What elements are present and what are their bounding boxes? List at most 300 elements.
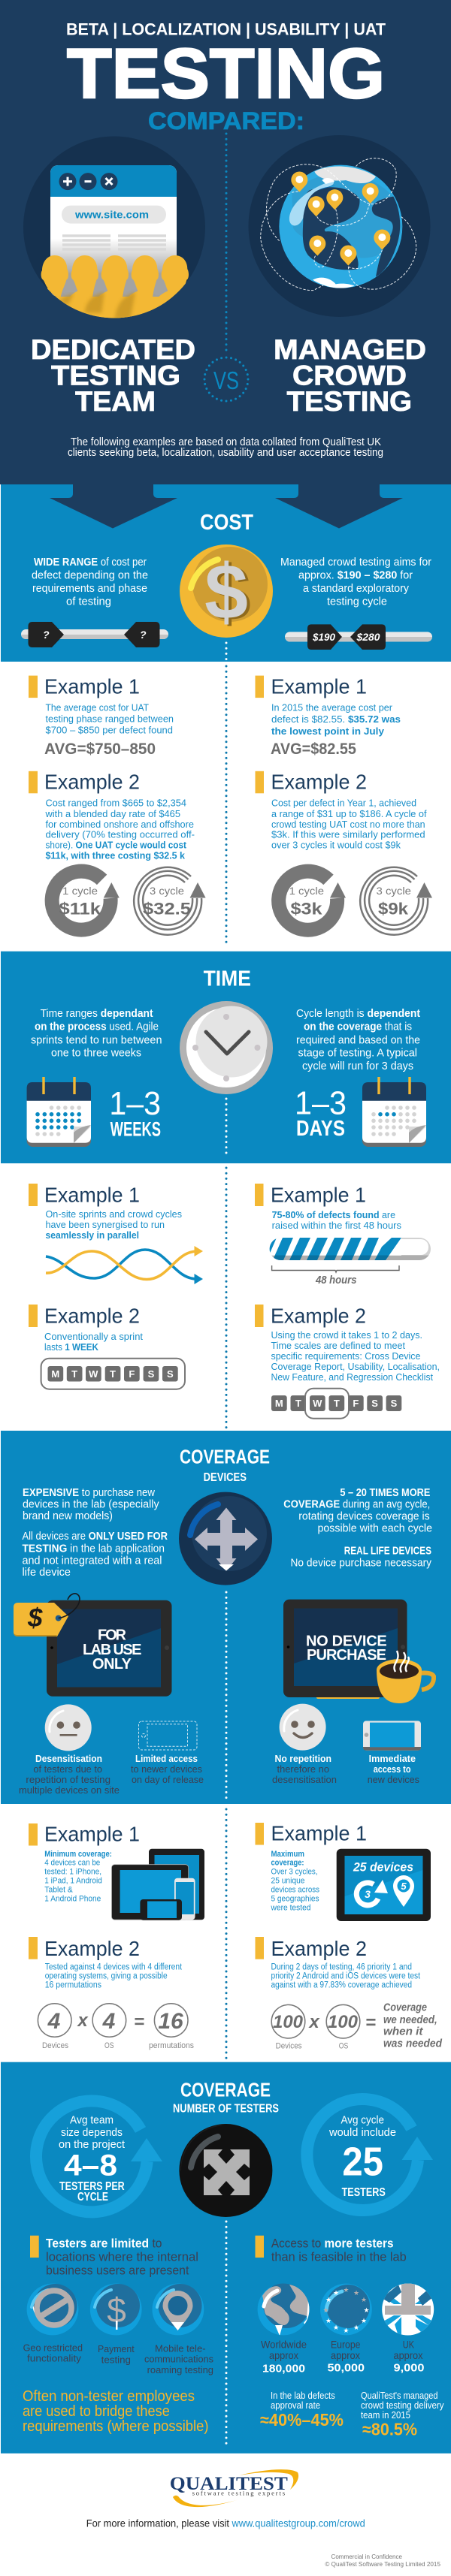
text: immediate access: new devices	[368, 1774, 419, 1785]
formula: 4 x 4 = 16: Devices	[42, 2041, 68, 2050]
center dotted line	[226, 134, 227, 354]
text: crowd cost summary: approx. $190 – $280 for	[298, 569, 413, 581]
stat: 1-3 days	[295, 1084, 347, 1141]
text: payment testing label: testing	[101, 2354, 131, 2366]
text: europe count: approx	[331, 2349, 360, 2361]
text: dedicated devices: brand new models)	[23, 1510, 113, 1522]
icon: tablet 25 devices: 3	[365, 1888, 371, 1900]
text: desensitisation: Desensitisation	[35, 1753, 102, 1764]
text: copyright	[325, 2553, 440, 2568]
example 1: maximum coverage: Maximum	[271, 1850, 304, 1859]
chart: progress bar	[269, 1238, 431, 1283]
text: immediate access	[368, 1753, 419, 1785]
text: immediate access: Immediate	[369, 1753, 416, 1764]
text: crowd testers: 25	[342, 2140, 383, 2185]
icon: tablet no device purchase	[283, 1600, 407, 1699]
callout: non-tester employees	[23, 2388, 209, 2435]
text: team size: Avg team	[70, 2115, 114, 2127]
text: crowd time: required and based on the	[296, 1034, 420, 1046]
icon: 1 cycle 11k: $11k	[59, 900, 101, 918]
text: geo restricted label: Geo restricted	[23, 2342, 83, 2354]
example 2: permutations: Tested against 4 devices with 4 different	[45, 1963, 183, 1972]
icon: browser window with team	[23, 137, 205, 330]
example 2: two day cycle: Time scales are defined to meet	[271, 1340, 405, 1351]
slider: dedicated unknown range	[21, 622, 168, 647]
example 2: two day cycle: Example 2	[271, 1305, 366, 1328]
week strip: seven days: W	[89, 1368, 98, 1380]
text: crowd time: on the coverage that is	[304, 1021, 412, 1033]
text: roaming testing label: Mobile tele-	[155, 2343, 206, 2354]
text: worldwide count	[261, 2339, 307, 2375]
text: team size: CYCLE	[77, 2191, 108, 2203]
week strip: highlighted days: T	[295, 1398, 301, 1409]
week strip: highlighted days: W	[313, 1398, 322, 1409]
formula: 100 x 100: when it	[383, 2025, 424, 2038]
example 1: dedicated cost: The average cost for UAT	[45, 701, 149, 713]
icon: tablet no device purchase: NO DEVICE	[306, 1633, 387, 1649]
icon: directional arrows	[179, 1492, 272, 1585]
example 2: coverage achieved: against with a 97.83% coverage achieved	[271, 1981, 412, 1990]
icon: payment dollar	[90, 2284, 142, 2335]
text: crowd testers	[328, 2115, 396, 2199]
heading: coverage number of testers: COVERAGE	[180, 2079, 271, 2101]
text: dedicated time	[31, 1008, 162, 1060]
formula: 100 x 100: was needed	[383, 2037, 443, 2050]
stat: lab approval rate	[260, 2390, 344, 2430]
logo: qualitest: QUALITEST	[170, 2474, 288, 2494]
icon: expand arrows	[179, 2124, 272, 2217]
formula: 100 x 100: =	[365, 2013, 376, 2033]
example 2: crowd cost: over 3 cycles it would cost $9k	[271, 840, 401, 851]
subtitle: test types: BETA | LOCALIZATION | USABILITY | UAT	[66, 20, 386, 39]
text: crowd devices: 5 – 20 TIMES MORE	[340, 1487, 431, 1499]
text: immediate access: access to	[374, 1763, 411, 1775]
icon: 3 cycle 32.5: $32.5	[143, 900, 191, 918]
icon: europe stars: ★	[353, 2290, 359, 2297]
text: crowd cost summary	[280, 557, 431, 608]
example 1: parallel cycles: Example 1	[44, 1184, 140, 1207]
text: dedicated devices: devices in the lab (especially	[23, 1499, 159, 1511]
icon: location pin	[152, 2284, 204, 2335]
text: crowd testers: would include	[328, 2127, 396, 2139]
heading: compared: COMPARED:	[148, 107, 304, 134]
icon: europe stars: ★	[343, 2327, 349, 2335]
example 1: minimum coverage	[29, 1822, 204, 1920]
text: crowd cost summary: testing cycle	[327, 596, 387, 608]
callout: non-tester employees: Often non-tester employees	[23, 2388, 195, 2405]
formula: 100 x 100: 100	[328, 2012, 359, 2032]
formula: 100 x 100: Coverage	[383, 2001, 427, 2014]
example 2: two day cycle: Using the crowd it takes 1 to 2 days.	[271, 1329, 422, 1341]
example 1: first 48 hours: raised within the first 48 hours	[272, 1220, 401, 1231]
icon: coffee cup	[377, 1651, 434, 1703]
panel: footer	[86, 2469, 440, 2568]
text: crowd time: stage of testing. A typical	[298, 1048, 417, 1060]
example 2: permutations: operating systems, giving a possible	[45, 1972, 168, 1981]
example 2: dedicated cost: Example 2	[44, 771, 140, 794]
icon: 1 cycle 3k: 1 cycle	[289, 885, 324, 897]
heading: coverage number of testers	[173, 2079, 279, 2115]
example 1: minimum coverage: 1 iPad, 1 Android	[44, 1877, 102, 1886]
example 2: dedicated cost: shore). One UAT cycle would cost	[45, 840, 187, 851]
text: more information: For more information, please visit www.qualitestgroup.com/crowd	[86, 2517, 365, 2529]
week strip: highlighted days: M	[275, 1398, 283, 1409]
example 1: dedicated cost: Example 1	[44, 675, 140, 698]
example 1: crowd cost	[256, 675, 401, 758]
text: team size: on the project	[59, 2139, 125, 2151]
heading: cost: COST	[200, 511, 253, 535]
heading: dedicated testing team: DEDICATED	[31, 334, 195, 365]
text: dedicated devices: and not integrated with a real	[23, 1555, 162, 1567]
icon: price tag: $	[27, 1603, 43, 1633]
formula: 4 x 4 = 16: =	[134, 2012, 144, 2032]
example 1: first 48 hours: Example 1	[271, 1184, 366, 1207]
icon: payment dollar: $	[107, 2291, 126, 2330]
week strip: seven days: T	[110, 1368, 116, 1380]
formula: 4 x 4 = 16: x	[76, 2010, 89, 2031]
text: geo restricted label: functionality	[27, 2353, 82, 2364]
text: europe count	[328, 2339, 365, 2375]
text: payment testing label: Payment	[98, 2343, 135, 2354]
heading: coverage devices: DEVICES	[204, 1471, 247, 1484]
example 2: one week sprint	[29, 1305, 185, 1389]
icon: 1 cycle 11k	[52, 871, 120, 930]
icon: browser window with team: www.site.com	[74, 209, 149, 221]
example 1: crowd cost: In 2015 the average cost per	[271, 701, 393, 713]
text: crowd devices: rotating devices coverage is	[298, 1511, 430, 1523]
example 2: crowd cost: Cost per defect in Year 1, achieved	[271, 798, 416, 809]
stat: lab approval rate: In the lab defects	[271, 2390, 335, 2401]
icon: europe stars: ★	[325, 2318, 331, 2325]
text: uk count: UK	[403, 2339, 415, 2351]
slider: dedicated unknown range: ?	[140, 629, 147, 641]
example 1: first 48 hours	[255, 1184, 431, 1286]
callout: non-tester employees: requirements (where possible)	[23, 2418, 209, 2435]
text: dedicated cost summary: of testing	[66, 596, 111, 608]
text: no repetition: No repetition	[275, 1753, 331, 1764]
example 1: crowd cost: AVG=$82.55	[271, 741, 356, 758]
text: copyright: © QualiTest Software Testing Limited 2015	[325, 2560, 440, 2568]
text: team size: 4–8	[64, 2149, 117, 2182]
week strip: seven days: M	[51, 1368, 59, 1380]
text: payment testing label	[98, 2343, 135, 2366]
icon: 3 cycle 9k: $9k	[378, 900, 409, 918]
example 1: parallel cycles: seamlessly in parallel	[45, 1229, 139, 1241]
example 1: maximum coverage: 25 unique	[271, 1877, 305, 1886]
panel: coverage testers	[1, 2062, 451, 2454]
example 2: coverage achieved: During 2 days of testing, 46 priority 1 and	[271, 1963, 412, 1972]
icon: new phone	[363, 1721, 421, 1751]
stat: 1-3 weeks	[109, 1085, 161, 1140]
text: dedicated time: one to three weeks	[51, 1048, 141, 1060]
stat: crowd approval rate: ≈80.5%	[362, 2420, 417, 2439]
text: dedicated time: Time ranges dependant	[41, 1008, 153, 1020]
intro text: The following examples are based on data collated from QualiTest UK	[71, 436, 381, 448]
example 2: permutations: Example 2	[44, 1937, 140, 1960]
example 2: dedicated cost: with a blended day rate of $465	[45, 808, 180, 819]
panel: cost	[1, 484, 451, 662]
example 1: minimum coverage: tested: 1 iPhone,	[44, 1868, 101, 1877]
heading: coverage devices: COVERAGE	[180, 1446, 270, 1468]
text: no repetition	[272, 1753, 337, 1785]
example 1: dedicated cost: testing phase ranged between	[45, 713, 174, 724]
example 2: coverage achieved	[256, 1937, 443, 2050]
example 1: maximum coverage: 5 geographies	[271, 1895, 319, 1904]
text: dedicated cost summary: defect depending on the	[32, 569, 148, 581]
example 2: dedicated cost: delivery (70% testing occurred off-	[45, 829, 195, 840]
callout: non-tester employees: are used to bridge these	[23, 2403, 170, 2420]
example 2: coverage achieved: priority 2 Android and iOS devices were test	[271, 1972, 421, 1981]
text: crowd testers: Avg cycle	[341, 2115, 384, 2127]
heading: dedicated testing team: TESTING	[51, 360, 180, 391]
example 2: dedicated cost: for combined onshore and offshore	[45, 819, 194, 830]
text: crowd devices: No device purchase necessary	[290, 1558, 432, 1570]
text: uk count: 9,000	[394, 2362, 424, 2375]
icon: tablet lab use only: ONLY	[92, 1656, 132, 1673]
icon: tablet 25 devices	[337, 1849, 431, 1921]
icon: dollar coin: $	[207, 550, 251, 638]
icon: calendar days	[362, 1077, 426, 1147]
text: access to more testers: than is feasible in the lab	[271, 2249, 407, 2264]
icon: tablet no device purchase: PURCHASE	[307, 1647, 386, 1664]
text: uk count	[394, 2339, 424, 2375]
panel: cost examples	[29, 666, 432, 947]
text: crowd time: Cycle length is dependent	[296, 1008, 420, 1020]
text: limited access: Limited access	[135, 1753, 198, 1764]
example 2: permutations	[29, 1937, 194, 2050]
formula: 100 x 100: x	[307, 2012, 320, 2032]
text: dedicated cost summary	[32, 557, 148, 608]
icon: 1 cycle 11k: 1 cycle	[62, 885, 98, 897]
example 1: parallel cycles: have been synergised to run	[45, 1219, 165, 1230]
text: testers limited: Testers are limited to	[46, 2237, 162, 2251]
text: worldwide count: 180,000	[262, 2363, 305, 2375]
icon: price tag	[14, 1594, 80, 1636]
icon: worldwide globe	[258, 2282, 311, 2336]
text: uk count: approx	[394, 2349, 422, 2361]
icon: tablet 25 devices: 5	[401, 1881, 407, 1892]
panel: time	[1, 952, 451, 1163]
text: no repetition: therefore no	[277, 1763, 329, 1775]
text: testers limited: business users are present	[46, 2264, 189, 2278]
example 1: minimum coverage: Example 1	[44, 1822, 140, 1845]
heading: managed crowd testing: MANAGED	[274, 334, 426, 365]
stat: crowd approval rate: QualiTest's managed	[361, 2390, 438, 2401]
icon: tablet lab use only	[47, 1600, 171, 1697]
title: testing: TESTING	[67, 34, 385, 113]
slider: crowd price range	[285, 624, 432, 650]
example 2: coverage achieved: Example 2	[271, 1937, 367, 1960]
stat: 1-3 weeks: WEEKS	[110, 1118, 161, 1140]
panel: header	[0, 0, 451, 484]
icon: happy face	[280, 1704, 326, 1751]
formula: 4 x 4 = 16: OS	[104, 2041, 114, 2050]
icon: neutral face	[45, 1704, 92, 1751]
text: team size: TESTERS PER	[59, 2180, 125, 2193]
badge: vs	[204, 357, 248, 401]
formula: 100 x 100	[271, 2001, 443, 2050]
text: dedicated time: on the process used. Agile	[35, 1021, 159, 1033]
icon: europe stars: ★	[322, 2307, 329, 2315]
icon: europe stars: ★	[333, 2290, 339, 2297]
text: testers limited: locations where the internal	[46, 2250, 198, 2264]
example 1: maximum coverage	[256, 1822, 431, 1921]
example 2: crowd cost: crowd testing UAT cost no more than	[271, 819, 425, 830]
week strip: highlighted days	[271, 1389, 401, 1419]
text: desensitisation: of testers due to	[33, 1763, 102, 1775]
stat: 1-3 days: 1–3	[295, 1084, 347, 1122]
example 2: dedicated cost	[29, 771, 195, 861]
icon: dollar coin	[180, 544, 273, 638]
icon: 3 cycle 9k	[360, 867, 432, 935]
formula: 4 x 4 = 16: 4	[102, 2009, 116, 2034]
example 1: first 48 hours: 75-80% of defects found are	[272, 1209, 395, 1220]
formula: 100 x 100: OS	[339, 2041, 348, 2050]
text: worldwide count: approx	[269, 2349, 298, 2361]
icon: globe with pins	[248, 135, 430, 317]
icon: geo restricted	[27, 2284, 78, 2335]
example 1: maximum coverage: Example 1	[271, 1822, 367, 1845]
example 1: maximum coverage: devices across	[271, 1886, 319, 1895]
icon: tablet lab use only: FOR	[98, 1627, 127, 1644]
icon: europe stars: ★	[363, 2307, 370, 2315]
icon: device group	[111, 1849, 204, 1920]
example 1: maximum coverage: Over 3 cycles,	[271, 1868, 317, 1877]
text: team size	[59, 2115, 125, 2203]
example 2: one week sprint: lasts 1 WEEK	[44, 1341, 99, 1353]
icon: 1 cycle 3k: $3k	[290, 900, 322, 918]
formula: 4 x 4 = 16: 4	[47, 2009, 61, 2034]
text: dedicated cost summary: requirements and phase	[32, 583, 147, 595]
icon: 3 cycle 9k: 3 cycle	[376, 885, 411, 897]
slider: crowd price range: $190	[312, 631, 335, 643]
stat: crowd approval rate	[361, 2390, 444, 2439]
arrow: right header pointer	[275, 484, 403, 529]
example 2: crowd cost: Example 2	[271, 771, 367, 794]
example 1: minimum coverage: Minimum coverage:	[44, 1850, 112, 1859]
chart: intertwined arrows	[46, 1246, 203, 1284]
icon: 1 cycle 3k	[279, 871, 346, 930]
example 1: parallel cycles: On-site sprints and crowd cycles	[45, 1208, 182, 1220]
icon: europe stars: ★	[361, 2297, 367, 2304]
text: crowd devices: possible with each cycle	[317, 1522, 432, 1534]
heading: managed crowd testing: TESTING	[287, 386, 412, 417]
example 1: dedicated cost: $700 – $850 per defect found	[45, 724, 173, 735]
panel: coverage devices	[1, 1431, 451, 1804]
heading: dedicated testing team: TEAM	[75, 386, 156, 417]
text: desensitisation: repetition of testing	[26, 1774, 110, 1785]
stat: lab approval rate: approval rate	[271, 2400, 320, 2411]
text: dedicated devices: TESTING in the lab application	[23, 1543, 165, 1555]
example 1: parallel cycles	[29, 1184, 203, 1284]
formula: 100 x 100: we needed,	[383, 2013, 437, 2026]
icon: europe stars: ★	[343, 2287, 349, 2294]
text: crowd devices	[283, 1487, 432, 1570]
stat: lab approval rate: ≈40%–45%	[260, 2410, 344, 2430]
week strip: highlighted days: S	[391, 1398, 398, 1409]
icon: 3 cycle 32.5	[134, 867, 206, 935]
text: geo restricted label	[23, 2342, 83, 2364]
stat: 1-3 days: DAYS	[296, 1117, 345, 1141]
example 1: maximum coverage: were tested	[271, 1904, 311, 1913]
example 1: minimum coverage: Tablet &	[44, 1886, 73, 1895]
text: crowd devices: COVERAGE during an avg cycle,	[283, 1499, 430, 1511]
text: europe count: 50,000	[328, 2362, 365, 2375]
text: crowd time	[296, 1008, 420, 1072]
icon: dollar coin: $	[204, 549, 248, 636]
text: roaming testing label: communications	[144, 2354, 213, 2365]
week strip: highlighted days: F	[353, 1398, 359, 1409]
example 1: crowd cost: defect is $82.55. $35.72 was	[271, 713, 401, 725]
text: dedicated cost summary: WIDE RANGE of cost per	[34, 557, 147, 569]
icon: dashed phone	[138, 1721, 197, 1750]
formula: 4 x 4 = 16	[38, 2004, 194, 2050]
chart: progress bar: 48 hours	[315, 1274, 356, 1286]
example 1: crowd cost: Example 1	[271, 675, 367, 698]
heading: dedicated testing team	[31, 334, 195, 417]
formula: 100 x 100: 100	[273, 2012, 304, 2032]
example 2: crowd cost: $3k. If this were similarly performed	[271, 829, 425, 840]
example 1: minimum coverage: 4 devices can be	[44, 1858, 100, 1867]
text: roaming testing label	[144, 2343, 213, 2375]
example 1: dedicated cost	[29, 675, 174, 758]
text: europe count: Europe	[331, 2339, 361, 2351]
icon: 3 cycle 32.5: 3 cycle	[150, 885, 184, 897]
slider: dedicated unknown range: ?	[43, 629, 50, 641]
text: limited access	[131, 1753, 204, 1785]
text: access to more testers	[256, 2236, 407, 2264]
text: crowd time: cycle will run for 3 days	[302, 1060, 413, 1072]
example 1: dedicated cost: AVG=$750–850	[44, 741, 156, 758]
logo: qualitest	[170, 2469, 298, 2507]
intro text: clients seeking beta, localization, usability and user acceptance testing	[68, 447, 383, 459]
slider: crowd price range: $280	[356, 631, 380, 643]
formula: 4 x 4 = 16: 16	[158, 2009, 183, 2034]
example 2: crowd cost	[256, 771, 427, 851]
formula: 100 x 100: Devices	[276, 2041, 302, 2050]
panel: time examples	[29, 1168, 440, 1428]
text: testers limited	[30, 2236, 198, 2278]
text: crowd cost summary: Managed crowd testing aims for	[280, 557, 431, 569]
icon: clock	[180, 1001, 273, 1094]
week strip: highlighted days: S	[371, 1398, 378, 1409]
example 1: minimum coverage: 1 Android Phone	[44, 1895, 101, 1904]
text: dedicated devices: life device	[23, 1567, 71, 1579]
text: dedicated time: sprints tend to run between	[31, 1034, 162, 1046]
heading: coverage devices	[180, 1446, 270, 1484]
text: team size: size depends	[61, 2127, 123, 2139]
text: desensitisation: multiple devices on site	[19, 1784, 120, 1796]
example 2: one week sprint: Example 2	[44, 1305, 140, 1328]
heading: managed crowd testing	[274, 334, 426, 417]
week strip: seven days: S	[148, 1368, 155, 1380]
text: no repetition: desensitisation	[272, 1774, 337, 1785]
text: dedicated devices	[23, 1487, 168, 1579]
text: dedicated devices: All devices are ONLY USED FOR	[23, 1531, 168, 1543]
week strip: seven days: F	[129, 1368, 135, 1380]
icon: europe stars: ★	[333, 2324, 339, 2332]
icon: calendar weeks	[27, 1077, 91, 1147]
text: crowd cost summary: a standard exploratory	[303, 583, 410, 595]
example 2: crowd cost: a range of $31 up to $186. A cycle of	[271, 808, 427, 819]
stat: crowd approval rate: crowd testing delivery	[361, 2400, 444, 2411]
text: limited access: to newer devices	[131, 1763, 202, 1775]
text: copyright: Commercial in Confidence	[331, 2553, 402, 2560]
icon: uk flag	[382, 2283, 434, 2336]
example 2: two day cycle: specific requirements: Cross Device	[271, 1350, 421, 1362]
week strip: highlighted days: T	[334, 1398, 340, 1409]
arrow: left header pointer	[50, 484, 177, 529]
